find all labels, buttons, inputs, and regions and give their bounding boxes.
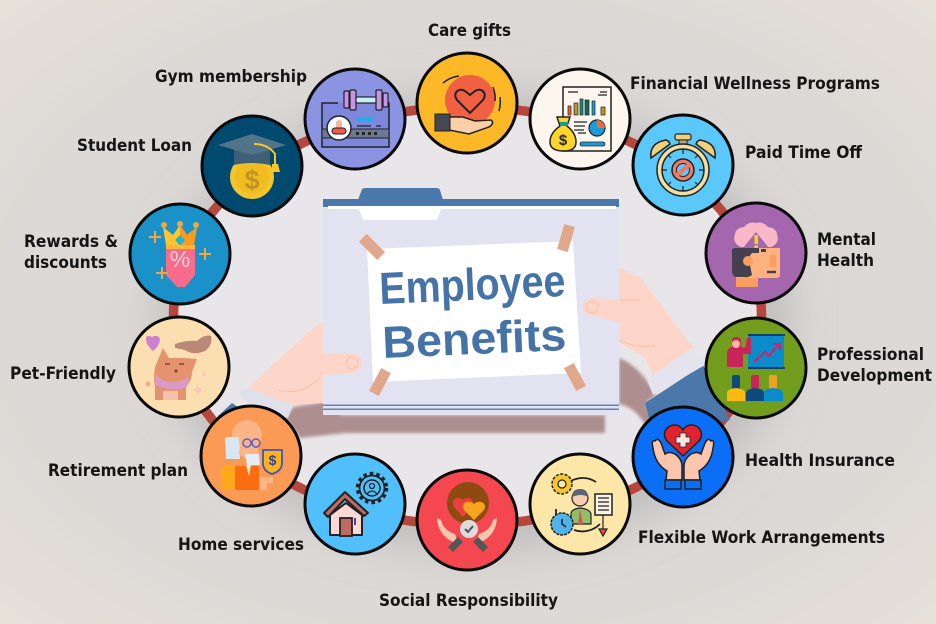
- folder white strip: [328, 206, 616, 220]
- icon: training class: [706, 318, 806, 418]
- icon: hand holding heart: [417, 53, 517, 153]
- label: Health Insurance: [745, 451, 895, 470]
- title: Employee: [378, 255, 566, 314]
- icon: head with brain: [706, 203, 806, 303]
- icon: house and gear: [305, 454, 405, 554]
- benefit: Professional Development: [706, 318, 932, 418]
- benefit: Health Insurance: [633, 407, 895, 507]
- benefit: Home services: [178, 454, 405, 554]
- benefit: Flexible Work Arrangements: [530, 454, 885, 554]
- folder top band: [323, 199, 619, 207]
- label: [817, 230, 876, 270]
- label: Social Responsibility: [379, 591, 558, 610]
- label: Home services: [178, 535, 304, 554]
- left sleeve: [218, 403, 250, 430]
- benefit: Pet-Friendly: [10, 317, 229, 417]
- left cuff: [240, 388, 293, 418]
- label: Pet-Friendly: [10, 364, 116, 383]
- label: Financial Wellness Programs: [630, 74, 880, 93]
- benefit: Paid Time Off: [633, 115, 863, 215]
- icon: crown discount tag: %: [170, 246, 190, 272]
- icon: hands and heart: [633, 407, 733, 507]
- label: Paid Time Off: [745, 143, 863, 162]
- icon: person, gear, clock and document: [530, 454, 630, 554]
- icon: crown discount tag: [130, 204, 230, 304]
- label: Mental: [817, 230, 876, 249]
- icon: stopwatch: [633, 115, 733, 215]
- label: [24, 232, 118, 272]
- paper note: [367, 241, 581, 382]
- right cuff: [647, 348, 705, 395]
- label: discounts: [24, 253, 107, 272]
- icon: graduation cap on coin: $: [244, 165, 260, 195]
- label: Professional: [817, 345, 924, 364]
- benefit: Care gifts: [417, 21, 517, 153]
- icon: graduation cap on coin: [202, 116, 302, 216]
- label: Flexible Work Arrangements: [638, 528, 885, 547]
- icon: elderly man with shield: $: [269, 452, 277, 468]
- icon: dumbbell and member card: [305, 69, 405, 169]
- label: Student Loan: [77, 136, 192, 155]
- icon: hands, hearts and check: [417, 470, 517, 570]
- label: Care gifts: [428, 21, 511, 40]
- left hand: [248, 322, 323, 405]
- benefit: Mental Health: [706, 203, 876, 303]
- benefit: Social Responsibility: [379, 470, 558, 610]
- right hand: [615, 266, 693, 375]
- label: Rewards &: [24, 232, 118, 251]
- ring connecting the benefits: [174, 107, 762, 525]
- title: Benefits: [381, 309, 567, 368]
- right sleeve: [645, 365, 730, 430]
- folder body: [323, 204, 619, 415]
- ring shadow: [163, 96, 787, 548]
- title: [378, 255, 567, 368]
- benefit: Financial Wellness Programs: [530, 69, 880, 169]
- icon: report and money bag: [530, 69, 630, 169]
- folder shadow: [285, 358, 656, 438]
- hand creases: [279, 300, 655, 392]
- label: Retirement plan: [48, 461, 188, 480]
- benefit: Retirement plan: [48, 406, 301, 506]
- label: Health: [817, 251, 874, 270]
- benefit: Gym membership: [155, 67, 405, 169]
- right thumb: [583, 298, 620, 322]
- icon: dog and caressing hand: [129, 317, 229, 417]
- central folder illustration: [218, 188, 730, 438]
- benefit: Student Loan: [77, 116, 302, 216]
- label: Gym membership: [155, 67, 307, 86]
- icon: report and money bag: $: [559, 132, 568, 149]
- tapes: [359, 224, 586, 396]
- benefit: Rewards & discounts: [24, 204, 230, 304]
- left thumb: [323, 353, 362, 375]
- folder tab: [358, 188, 443, 200]
- icon: elderly man with shield: [201, 406, 301, 506]
- label: [817, 345, 932, 385]
- folder bottom lines: [323, 404, 619, 410]
